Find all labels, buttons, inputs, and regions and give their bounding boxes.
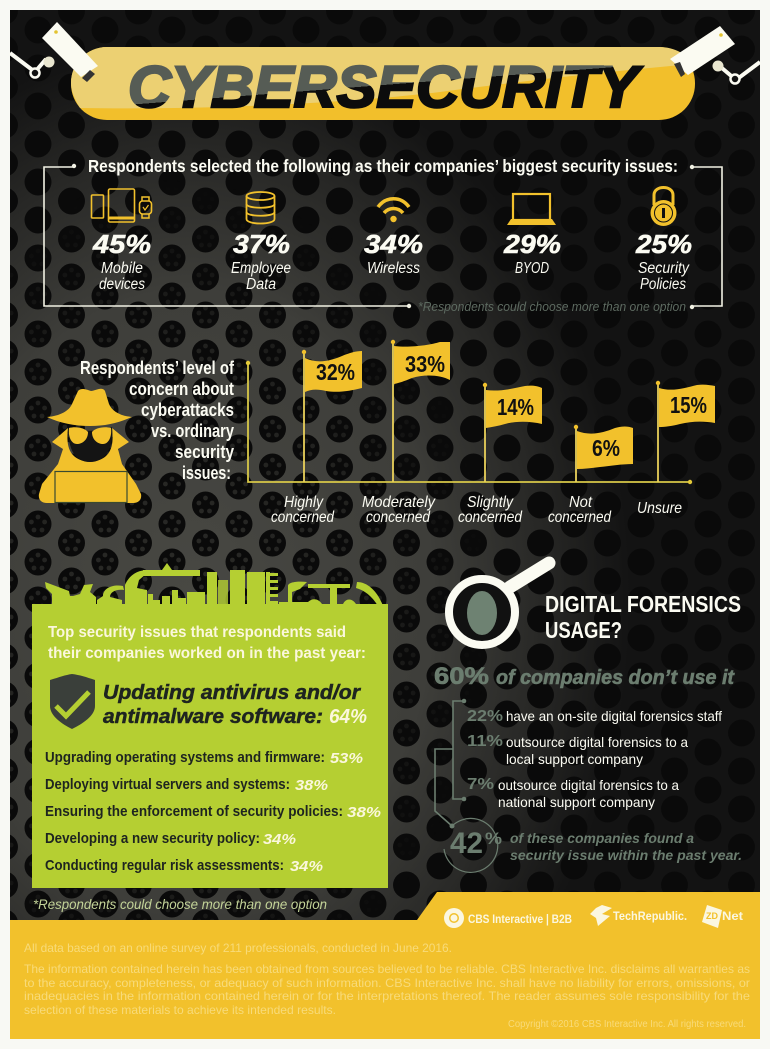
logo: TechRepublic: TechRepublic. bbox=[613, 909, 687, 923]
icon: mobile devices bbox=[92, 189, 152, 222]
flag labels: concerned bbox=[271, 509, 335, 526]
flag: not concerned 6%: 6% bbox=[592, 435, 620, 461]
list: usage breakdown: have an on-site digital forensics staff bbox=[506, 708, 722, 724]
stat: mobile devices: Mobile bbox=[101, 260, 143, 277]
disclaimer: The information contained herein has been obtained from sources believed to be reliable. CBS Interactive Inc. disclaims all warranties as bbox=[24, 962, 750, 976]
panel heading bbox=[48, 624, 366, 662]
icon: left security camera bbox=[10, 22, 98, 82]
stat: 42 percent: security issue within the past year. bbox=[510, 847, 742, 863]
issue list bbox=[45, 749, 381, 875]
panel: biggest security issues bbox=[44, 156, 722, 314]
issue list: 34% bbox=[263, 831, 296, 848]
flag: moderately concerned 33%: 33% bbox=[405, 351, 445, 377]
heading: USAGE? bbox=[545, 617, 622, 643]
flag: not concerned 6% bbox=[574, 425, 633, 482]
icon: database bbox=[246, 192, 274, 224]
stat: mobile devices: 45% bbox=[92, 229, 151, 259]
stat: BYOD: BYOD bbox=[515, 260, 549, 277]
flag labels: concerned bbox=[548, 509, 612, 526]
stat: security policies: Policies bbox=[640, 276, 686, 293]
panel: top security issues bbox=[32, 563, 388, 888]
survey note: All data based on an online survey of 211 professionals, conducted in June 2016. bbox=[24, 941, 452, 955]
footnote: *Respondents could choose more than one option bbox=[418, 299, 686, 314]
list: usage breakdown: local support company bbox=[506, 751, 643, 767]
flag: slightly concerned 14%: 14% bbox=[497, 394, 534, 420]
issue list: Conducting regular risk assessments: bbox=[45, 857, 284, 874]
text: concern question: issues: bbox=[182, 463, 231, 483]
issue list: Ensuring the enforcement of security policies: bbox=[45, 803, 343, 820]
text: concern question: concern about bbox=[129, 379, 234, 399]
bracket dots bbox=[450, 699, 466, 828]
flag: unsure 15% bbox=[656, 381, 715, 482]
heading: Respondents selected the following as their companies’ biggest security issues: bbox=[88, 156, 678, 176]
issue list: Developing a new security policy: bbox=[45, 830, 260, 847]
stat: mobile devices bbox=[92, 229, 151, 293]
stat: wireless: Wireless bbox=[367, 260, 420, 277]
stat: BYOD bbox=[503, 229, 561, 277]
stat: wireless bbox=[364, 229, 423, 277]
green panel bbox=[32, 608, 388, 888]
logo: TechRepublic bbox=[590, 905, 687, 926]
logo: ZDNet bbox=[702, 905, 743, 928]
icon: right security camera bbox=[670, 26, 760, 84]
flag labels: Moderately bbox=[362, 494, 436, 511]
list: usage breakdown: national support company bbox=[498, 794, 655, 810]
chart axes bbox=[246, 361, 692, 484]
text: concern question: Respondents’ level of bbox=[80, 358, 235, 378]
issue list: 34% bbox=[290, 858, 323, 875]
title banner bbox=[71, 47, 695, 120]
panel heading: Top security issues that respondents said bbox=[48, 624, 346, 641]
chart: concern flags bbox=[246, 340, 715, 526]
flag: moderately concerned 33% bbox=[391, 340, 450, 482]
skyline bbox=[32, 563, 388, 609]
footnote: *Respondents could choose more than one option bbox=[33, 896, 327, 912]
issue list: 38% bbox=[295, 777, 328, 794]
stat: 42 percent: 42 bbox=[450, 827, 483, 860]
title text: CYBERSECURITY bbox=[128, 55, 643, 120]
footer band bbox=[10, 892, 760, 1039]
top issue: antivirus 64%: antimalware software: bbox=[103, 705, 323, 728]
stat: employee data bbox=[231, 229, 291, 293]
flag: unsure 15%: 15% bbox=[670, 392, 707, 418]
list: usage breakdown: outsource digital forensics to a bbox=[506, 734, 688, 750]
heading bbox=[545, 591, 741, 643]
stat: employee data: 37% bbox=[233, 229, 290, 259]
stat: mobile devices: devices bbox=[99, 276, 145, 293]
panel heading: their companies worked on in the past year: bbox=[48, 645, 366, 662]
stat: employee data: Employee bbox=[231, 260, 291, 277]
top issue: antivirus 64% bbox=[103, 681, 367, 728]
logo: CBS Interactive bbox=[444, 908, 572, 928]
banner pill bbox=[71, 47, 695, 120]
logo: ZDNet: ZD bbox=[706, 911, 718, 921]
icon: padlock bbox=[650, 188, 676, 226]
disclaimer bbox=[24, 962, 750, 1017]
footer bbox=[10, 892, 760, 1039]
stat: 42 percent: % bbox=[485, 829, 502, 848]
logo: CBS Interactive: CBS Interactive | B2B bbox=[468, 912, 572, 926]
flag labels: Unsure bbox=[637, 500, 682, 517]
stat: security policies: Security bbox=[638, 260, 690, 277]
logo: ZDNet: Net bbox=[722, 909, 743, 923]
list: usage breakdown: 22% bbox=[467, 708, 503, 725]
disclaimer: to the accuracy, completeness, or adequacy of such information. CBS Interactive Inc. shall have no liability for errors, omissions, or bbox=[24, 976, 750, 990]
list: usage breakdown: 7% bbox=[467, 776, 494, 793]
flag labels: Highly bbox=[284, 494, 324, 511]
banner highlight bbox=[71, 47, 693, 108]
text: concern question: cyberattacks bbox=[141, 400, 234, 420]
stat: security policies bbox=[635, 229, 692, 293]
flag: slightly concerned 14% bbox=[483, 383, 542, 482]
stat: 42 percent bbox=[450, 827, 742, 863]
disclaimer: selection of these materials to achieve its intended results. bbox=[24, 1003, 336, 1017]
stat: BYOD: 29% bbox=[503, 229, 561, 259]
issue list: 38% bbox=[347, 804, 381, 821]
stat: 60 percent bbox=[434, 663, 735, 690]
icon: hacker bbox=[39, 389, 141, 503]
icon: magnifying glass bbox=[449, 563, 549, 645]
issue list: Upgrading operating systems and firmware: bbox=[45, 749, 325, 766]
issue list: Deploying virtual servers and systems: bbox=[45, 776, 290, 793]
bracket lines bbox=[435, 701, 498, 872]
list: usage breakdown: outsource digital forensics to a bbox=[498, 777, 679, 793]
stat: security policies: 25% bbox=[635, 229, 692, 259]
icon: wifi bbox=[378, 199, 409, 222]
flag labels bbox=[271, 494, 682, 526]
issue list: 53% bbox=[330, 750, 363, 767]
stat: 60 percent: of companies don’t use it bbox=[496, 667, 735, 689]
list: usage breakdown: 11% bbox=[467, 733, 503, 750]
bracket frame bbox=[44, 167, 722, 306]
icon: laptop bbox=[507, 194, 556, 225]
text: concern question bbox=[80, 358, 235, 483]
text: concern question: vs. ordinary bbox=[151, 421, 234, 441]
flag labels: concerned bbox=[458, 509, 523, 526]
disclaimer: inadequacies in the information contained herein or for the interpretations thereof. The reader assumes sole responsibility for the bbox=[24, 989, 750, 1003]
stat: wireless: 34% bbox=[364, 229, 423, 259]
flag labels: concerned bbox=[366, 509, 431, 526]
copyright: Copyright ©2016 CBS Interactive Inc. All rights reserved. bbox=[508, 1018, 746, 1030]
stat: 42 percent: of these companies found a bbox=[510, 830, 694, 846]
top issue: antivirus 64%: Updating antivirus and/or bbox=[103, 681, 361, 704]
flag labels: Slightly bbox=[467, 494, 514, 511]
text: concern question: security bbox=[175, 442, 234, 462]
flag: highly concerned 32%: 32% bbox=[316, 359, 355, 385]
flag labels: Not bbox=[569, 494, 593, 511]
list: usage breakdown bbox=[467, 708, 722, 810]
panel: digital forensics bbox=[434, 563, 742, 872]
stat: 60 percent: 60% bbox=[434, 663, 489, 690]
icon: shield check bbox=[50, 674, 95, 729]
stat: employee data: Data bbox=[246, 276, 276, 293]
flag: highly concerned 32% bbox=[302, 350, 362, 482]
top issue: antivirus 64%: 64% bbox=[329, 706, 367, 728]
